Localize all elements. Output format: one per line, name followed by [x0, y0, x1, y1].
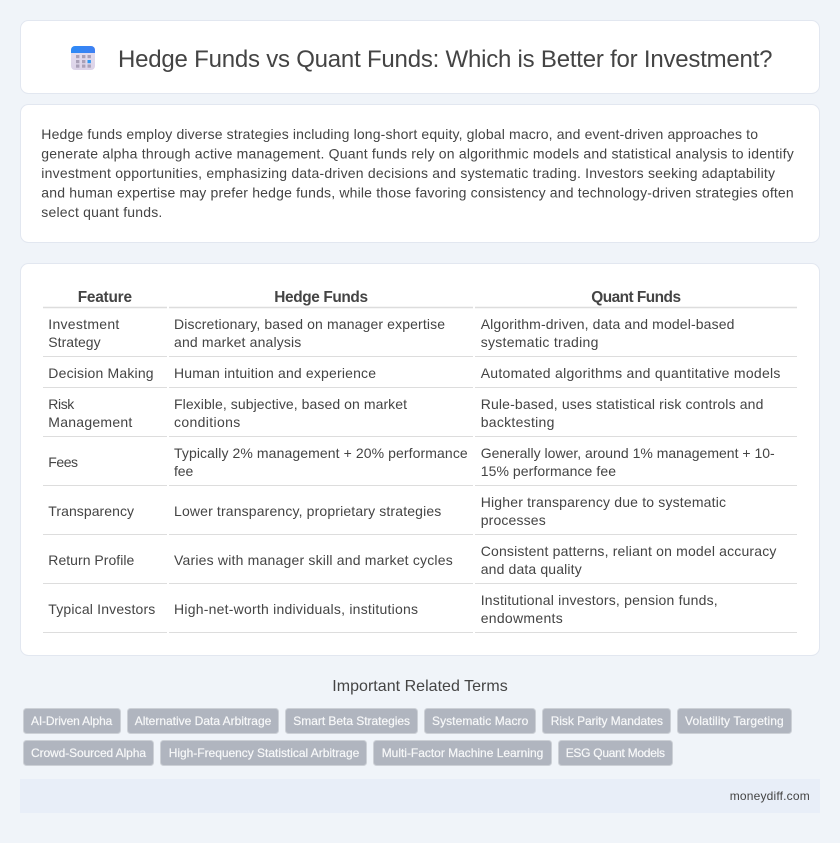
tag: Smart Beta Strategies: Smart Beta Strategies	[293, 714, 410, 728]
row: transparency: Transparency	[48, 503, 134, 519]
row: return profile: and data quality	[481, 561, 582, 577]
row: transparency: Lower transparency, proprietary strategies	[174, 503, 441, 519]
tag: Multi-Factor Machine Learning: Multi-Factor Machine Learning	[382, 746, 543, 760]
row: typical investors: High-net-worth individuals, institutions	[174, 601, 418, 617]
intro paragraph: Hedge funds employ diverse strategies including long-short equity, global macro, and event-driven approaches to	[41, 126, 758, 142]
title: Hedge Funds vs Quant Funds: Which is Better for Investment?	[118, 46, 772, 73]
row: investment strategy: and market analysis	[174, 334, 301, 350]
row: fees: 15% performance fee	[481, 463, 616, 479]
tag: Alternative Data Arbitrage: Alternative Data Arbitrage	[135, 714, 272, 728]
tag: Volatility Targeting: Volatility Targeting	[685, 714, 784, 728]
panel: title header	[20, 20, 820, 94]
table header row	[43, 289, 797, 308]
tag: Systematic Macro: Systematic Macro	[432, 714, 529, 728]
row: risk management: Rule-based, uses statistical risk controls and	[481, 396, 763, 412]
tag: ESG Quant Models: ESG Quant Models	[566, 746, 665, 760]
row: return profile	[43, 543, 797, 584]
row: decision making: Human intuition and experience	[174, 365, 376, 381]
row: investment strategy	[43, 316, 797, 356]
row: investment strategy: Investment	[48, 316, 119, 332]
row: typical investors: Typical Investors	[48, 601, 155, 617]
tag: High-Frequency Statistical Arbitrage	[160, 740, 366, 766]
row: risk management: Flexible, subjective, based on market	[174, 396, 407, 412]
tag: High-Frequency Statistical Arbitrage: High-Frequency Statistical Arbitrage	[169, 746, 360, 760]
row: fees: Fees	[48, 454, 78, 470]
tag: Crowd-Sourced Alpha	[24, 740, 154, 766]
row: typical investors	[43, 592, 797, 632]
tag: AI-Driven Alpha	[24, 708, 120, 734]
row: fees: Typically 2% management + 20% performance	[174, 445, 468, 461]
panel: introduction	[20, 104, 820, 242]
tag: Risk Parity Mandates	[542, 708, 670, 734]
row: risk management: Risk	[48, 396, 75, 412]
table header row: Hedge Funds	[274, 289, 368, 306]
row: return profile: Return Profile	[48, 552, 135, 568]
row: fees	[43, 445, 797, 486]
footer source text: moneydiff.com	[730, 789, 810, 803]
tag: Alternative Data Arbitrage	[128, 708, 278, 734]
row: investment strategy: Discretionary, based on manager expertise	[174, 316, 445, 332]
tag: Multi-Factor Machine Learning	[374, 740, 552, 766]
row: fees: fee	[174, 463, 194, 479]
tag: Volatility Targeting	[678, 708, 792, 734]
intro paragraph	[41, 126, 794, 220]
tag: Systematic Macro	[424, 708, 536, 734]
row: risk management: conditions	[174, 414, 240, 430]
row: typical investors: endowments	[481, 610, 563, 626]
row: investment strategy: systematic trading	[481, 334, 598, 350]
intro paragraph: generate alpha through active management. Quant funds rely on algorithmic models and statistical analysis to identify	[41, 145, 794, 161]
row: investment strategy: Strategy	[48, 334, 101, 350]
row: transparency: processes	[481, 512, 546, 528]
intro paragraph: and human expertise may prefer hedge funds, while those favoring consistency and technology-driven strategies often	[41, 184, 794, 200]
intro paragraph: select quant funds.	[41, 204, 162, 220]
row: risk management: Management	[48, 414, 132, 430]
tag: ESG Quant Models	[558, 740, 672, 766]
tag: Crowd-Sourced Alpha: Crowd-Sourced Alpha	[31, 746, 146, 760]
row: return profile: Varies with manager skill and market cycles	[174, 552, 453, 568]
row: decision making: Automated algorithms and quantitative models	[481, 365, 780, 381]
footer bar	[20, 779, 820, 813]
icon: calendar	[71, 46, 95, 70]
tag: Risk Parity Mandates: Risk Parity Mandates	[551, 714, 663, 728]
intro paragraph: investment opportunities, emphasizing data-driven decisions and systematic trading. Investors seeking adaptability	[41, 165, 775, 181]
row: decision making	[43, 365, 797, 388]
row: transparency	[43, 494, 797, 534]
tag: Smart Beta Strategies	[286, 708, 418, 734]
table header row: Quant Funds	[591, 289, 681, 306]
row: fees: Generally lower, around 1% management + 10-	[481, 445, 775, 461]
panel: related term tags	[24, 708, 792, 766]
row: return profile: Consistent patterns, reliant on model accuracy	[481, 543, 776, 559]
row: investment strategy: Algorithm-driven, data and model-based	[481, 316, 734, 332]
row: typical investors: Institutional investors, pension funds,	[481, 592, 718, 608]
row: decision making: Decision Making	[48, 365, 154, 381]
tag: AI-Driven Alpha: AI-Driven Alpha	[31, 714, 113, 728]
row: risk management	[43, 396, 797, 436]
panel: comparison table	[20, 264, 820, 656]
row: transparency: Higher transparency due to systematic	[481, 494, 726, 510]
heading: important related terms: Important Related Terms	[332, 678, 508, 695]
table header row: Feature	[78, 289, 132, 306]
row: risk management: backtesting	[481, 414, 554, 430]
